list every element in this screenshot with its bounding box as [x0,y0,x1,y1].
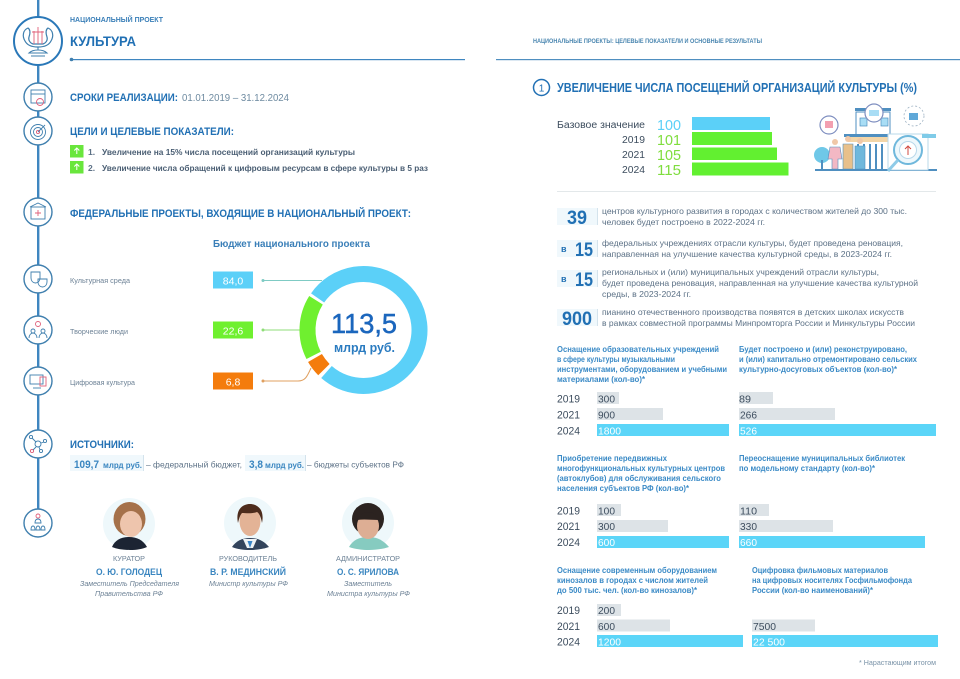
chart: film digitisation: 7500 [753,621,776,633]
curator text: КУРАТОР [113,554,145,563]
stat: 39 centres [557,206,907,229]
goals list: Увеличение на 15% числа посещений организаций культуры [102,147,355,157]
head text: В. Р. МЕДИНСКИЙ [210,566,286,578]
sources text: – федеральный бюджет, [146,460,242,470]
stat: 15 federal: 15 [575,240,593,261]
chart: educational institutions: 300 [598,394,615,406]
section number: 1 [539,84,545,94]
donut total: млрд руб. [334,340,395,355]
chart: cinema halls: до 500 тыс. чел. (кол-во кинозалов)* [557,586,698,595]
donut total [331,308,397,355]
head text: Министр культуры РФ [209,579,288,588]
stat: 15 regional: в [561,274,567,284]
header: national project [70,15,164,49]
administrator text: Заместитель [344,579,392,588]
stat: 15 federal: федеральных учреждениях отрасли культуры, будет проведена реновация, [602,238,903,248]
chart: municipal libraries: Переоснащение муниципальных библиотек [739,454,906,463]
stat: 15 regional: 15 [575,270,593,291]
visits bar chart: 101 [657,132,681,149]
budget value boxes: 84,0 [223,276,243,288]
chart: educational institutions: 2024 [557,426,580,438]
curator text [80,554,179,598]
stat: 15 regional: будет проведена реновация, направленная на улучшение качества культурной [602,278,918,288]
portrait: Golodets [103,498,155,550]
icon: federal projects [24,198,52,226]
chart: educational institutions: 2019 [557,394,580,406]
text: implementation dates [70,92,289,104]
heading: goals: ЦЕЛИ И ЦЕЛЕВЫЕ ПОКАЗАТЕЛИ: [70,126,234,138]
chart: film digitisation: Оцифровка фильмовых материалов [752,566,888,575]
icon: calendar [24,83,52,111]
icon: digital culture [24,367,52,395]
budget value boxes: 6,8 [226,376,240,388]
stat: 900 pianos: в рамках совместной программы Минпромторга России и Минкультуры России [602,318,915,328]
sources text: млрд руб. [103,461,142,470]
donut total: 113,5 [331,308,397,339]
chart: rural culture objects: 89 [739,394,751,406]
chart: mobile cultural centres: населения субъектов РФ (кол-во)* [557,484,690,493]
chart: mobile cultural centres: 2021 [557,521,580,533]
chart: rural culture objects [739,345,936,438]
sources text: – бюджеты субъектов РФ [307,460,404,470]
chart: mobile cultural centres: 300 [598,521,615,533]
chart: educational institutions: 1800 [598,426,621,438]
administrator text: АДМИНИСТРАТОР [336,554,400,563]
visits bar chart: 2024 [622,165,645,176]
curator text: Правительства РФ [95,589,163,598]
visits bar chart: 115 [657,162,681,179]
heading: federal projects: ФЕДЕРАЛЬНЫЕ ПРОЕКТЫ, ВХОДЯЩИЕ В НАЦИОНАЛЬНЫЙ ПРОЕКТ: [70,207,411,220]
icon: lyre [14,17,62,65]
project labels: Культурная среда [70,276,131,285]
stat: 15 regional: региональных и (или) муниципальных учреждений отрасли культуры, [602,267,879,277]
stat: 15 regional: среды, в 2023-2024 гг. [602,289,691,299]
chart: cinema halls: 600 [598,621,615,633]
icon: hierarchy [24,509,52,537]
chart: educational institutions: материалами (кол-во)* [557,375,646,384]
chart: rural culture objects: и (или) капитально отремонтировано сельских [739,355,918,364]
chart: mobile cultural centres: 600 [598,537,615,549]
sources text: 109,7 [74,459,99,471]
chart: rural culture objects: культурно-досуговых объектов (кол-во)* [739,365,898,374]
header right: НАЦИОНАЛЬНЫЕ ПРОЕКТЫ: ЦЕЛЕВЫЕ ПОКАЗАТЕЛИ И ОСНОВНЫЕ РЕЗУЛЬТАТЫ [533,39,762,45]
visits bar chart: 105 [657,147,681,164]
divider [557,191,936,192]
administrator text: О. С. ЯРИЛОВА [337,567,399,578]
chart: cinema halls: кинозалов в городах с числом жителей [557,576,708,585]
chart: mobile cultural centres: 2024 [557,537,580,549]
icon: sources network [24,430,52,458]
visits bar chart: 2019 [622,135,645,146]
portrait: Medinsky [224,497,276,550]
project labels: Творческие люди [70,327,128,336]
header rule right [496,59,960,60]
text: implementation dates: 01.01.2019 – 31.12.2024 [182,92,289,104]
text: implementation dates: СРОКИ РЕАЛИЗАЦИИ: [70,92,178,104]
budget value boxes: 22,6 [223,326,243,338]
chart: municipal libraries: по модельному стандарту (кол-во)* [739,464,876,473]
visits bar chart: Базовое значение [557,120,645,131]
administrator text [327,554,410,598]
chart: cinema halls: 2019 [557,605,580,617]
stat: 15 federal: направленная на улучшение качества культурной среды, в 2023-2024 гг. [602,249,892,259]
sources text: млрд руб. [265,461,304,470]
stat: 900 pianos [557,307,915,330]
goals list: 1. [88,147,95,157]
chart: municipal libraries: 660 [740,537,757,549]
chart: film digitisation [752,566,938,648]
chart: municipal libraries [739,454,925,549]
illustration: culture building with people [814,104,937,171]
chart: cinema halls [557,566,743,648]
chart: educational institutions: инструментами, оборудованием и учебными [557,365,727,374]
visits bar chart: 2021 [622,150,645,161]
chart: educational institutions: 900 [598,410,615,422]
icon: target [24,117,52,145]
visits bar chart [557,117,788,179]
goals list [70,145,428,174]
stat: 39 centres: человек будет построено в 2022-2024 гг. [602,217,765,227]
chart: municipal libraries: 110 [740,506,757,518]
head text [209,554,288,588]
chart: mobile cultural centres: многофункциональных культурных центров [557,464,725,473]
chart: educational institutions: Оснащение образовательных учреждений [557,345,719,354]
project labels: Цифровая культура [70,378,136,387]
section number [534,80,550,96]
connectors [262,279,322,382]
chart: film digitisation: на цифровых носителях Госфильмофонда [752,576,913,585]
chart: cinema halls: 200 [598,605,615,617]
icon: creative people [24,316,52,344]
timeline spine [37,0,39,510]
chart: educational institutions: 2021 [557,410,580,422]
visits bar chart: 100 [657,117,681,134]
curator text: О. Ю. ГОЛОДЕЦ [96,567,162,578]
head text: РУКОВОДИТЕЛЬ [219,554,277,563]
chart: rural culture objects: Будет построено и (или) реконструировано, [739,345,907,354]
icon: theatre masks [24,265,52,293]
header: national project: КУЛЬТУРА [70,33,136,49]
donut chart [307,274,420,386]
project labels [70,276,136,387]
sources text: 3,8 [249,459,263,471]
goals list: 2. [88,163,95,173]
chart: film digitisation: России (кол-во наименований)* [752,586,874,595]
stat: 39 centres: 39 [567,208,587,229]
chart: cinema halls: Оснащение современным оборудованием [557,566,717,575]
chart: cinema halls: 2024 [557,636,580,648]
header: national project: НАЦИОНАЛЬНЫЙ ПРОЕКТ [70,15,164,24]
stat: 15 federal: в [561,244,567,254]
chart: mobile cultural centres [557,454,729,549]
chart: rural culture objects: 266 [740,410,757,422]
chart: educational institutions [557,345,729,438]
chart: mobile cultural centres: 100 [598,506,615,518]
section heading: УВЕЛИЧЕНИЕ ЧИСЛА ПОСЕЩЕНИЙ ОРГАНИЗАЦИЙ КУЛЬТУРЫ (%) [557,80,917,95]
stat: 900 pianos: 900 [562,309,592,330]
budget value boxes [213,272,253,390]
heading: budget: Бюджет национального проекта [213,238,370,250]
heading: sources: ИСТОЧНИКИ: [70,439,134,451]
chart: cinema halls: 1200 [598,636,621,648]
goals list: Увеличение числа обращений к цифровым ресурсам в сфере культуры в 5 раз [102,163,428,173]
chart: mobile cultural centres: Приобретение передвижных [557,454,668,463]
chart: cinema halls: 2021 [557,621,580,633]
stat: 900 pianos: пианино отечественного производства появятся в детских школах искусств [602,307,904,317]
stat: 39 centres: центров культурного развития в городах с количеством жителей до 300 тыс. [602,206,907,216]
curator text: Заместитель Председателя [80,579,179,588]
stat: 15 federal [557,238,903,261]
administrator text: Министра культуры РФ [327,589,410,598]
footnote: * Нарастающим итогом [859,658,936,667]
chart: municipal libraries: 330 [740,521,757,533]
header rule left [70,58,465,61]
chart: rural culture objects: 526 [740,426,757,438]
sources text [70,455,404,471]
chart: film digitisation: 22 500 [753,636,785,648]
chart: educational institutions: в сфере культуры музыкальными [557,355,675,364]
stat: 15 regional [557,267,918,299]
chart: mobile cultural centres: (автоклубов) для обслуживания сельского [557,474,721,483]
portrait: Yarilova [342,497,394,550]
chart: mobile cultural centres: 2019 [557,506,580,518]
